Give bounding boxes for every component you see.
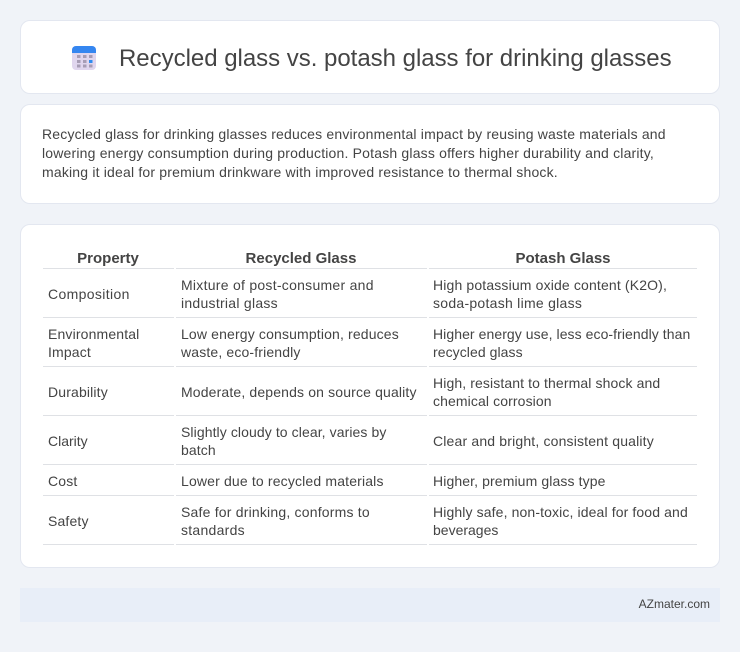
row: cost: Higher, premium glass type <box>433 473 606 489</box>
row: composition: industrial glass <box>181 295 278 311</box>
table header <box>77 250 611 267</box>
row: safety: Safety <box>48 513 89 529</box>
intro text: lowering energy consumption during production. Potash glass offers higher durability and clarity, <box>42 145 654 161</box>
row: composition: Mixture of post-consumer and <box>181 277 374 293</box>
row: durability: High, resistant to thermal shock and <box>433 375 660 391</box>
footer bar <box>20 588 720 622</box>
panel: introduction <box>20 104 720 204</box>
row: safety: beverages <box>433 522 498 538</box>
table header: Potash Glass <box>515 250 611 267</box>
row: safety: Safe for drinking, conforms to <box>181 504 370 520</box>
table header: Property <box>77 250 139 267</box>
row: clarity <box>48 424 654 458</box>
title: Recycled glass vs. potash glass for drinking glasses <box>119 45 672 72</box>
intro text: Recycled glass for drinking glasses reduces environmental impact by reusing waste materials and <box>42 126 666 142</box>
row: environmental impact: Higher energy use, less eco-friendly than <box>433 326 690 342</box>
panel: comparison table <box>20 224 720 568</box>
row: clarity: batch <box>181 442 216 458</box>
row: durability: Moderate, depends on source quality <box>181 384 417 400</box>
row: environmental impact <box>48 326 690 360</box>
row: environmental impact: recycled glass <box>433 344 523 360</box>
icon: calendar <box>72 46 96 70</box>
row: composition <box>48 277 667 311</box>
row: clarity: Slightly cloudy to clear, varies by <box>181 424 386 440</box>
row: cost: Cost <box>48 473 77 489</box>
row: clarity: Clarity <box>48 433 88 449</box>
row: safety <box>48 504 688 538</box>
row: environmental impact: Impact <box>48 344 91 360</box>
panel: title card <box>20 20 720 94</box>
row: cost <box>48 473 606 489</box>
row: composition: High potassium oxide content (K2O), <box>433 277 667 293</box>
intro text <box>42 126 666 180</box>
row: durability: Durability <box>48 384 108 400</box>
row: composition: soda-potash lime glass <box>433 295 582 311</box>
row: clarity: Clear and bright, consistent quality <box>433 433 654 449</box>
row: environmental impact: Low energy consumption, reduces <box>181 326 399 342</box>
row: durability: chemical corrosion <box>433 393 552 409</box>
row: environmental impact: Environmental <box>48 326 139 342</box>
row: composition: Composition <box>48 286 130 302</box>
row: safety: Highly safe, non-toxic, ideal for food and <box>433 504 688 520</box>
row: environmental impact: waste, eco-friendly <box>181 344 301 360</box>
row: cost: Lower due to recycled materials <box>181 473 384 489</box>
footer credit: AZmater.com <box>639 597 710 611</box>
intro text: making it ideal for premium drinkware with improved resistance to thermal shock. <box>42 164 558 180</box>
table header: Recycled Glass <box>246 250 356 267</box>
row: safety: standards <box>181 522 245 538</box>
row: durability <box>48 375 660 409</box>
